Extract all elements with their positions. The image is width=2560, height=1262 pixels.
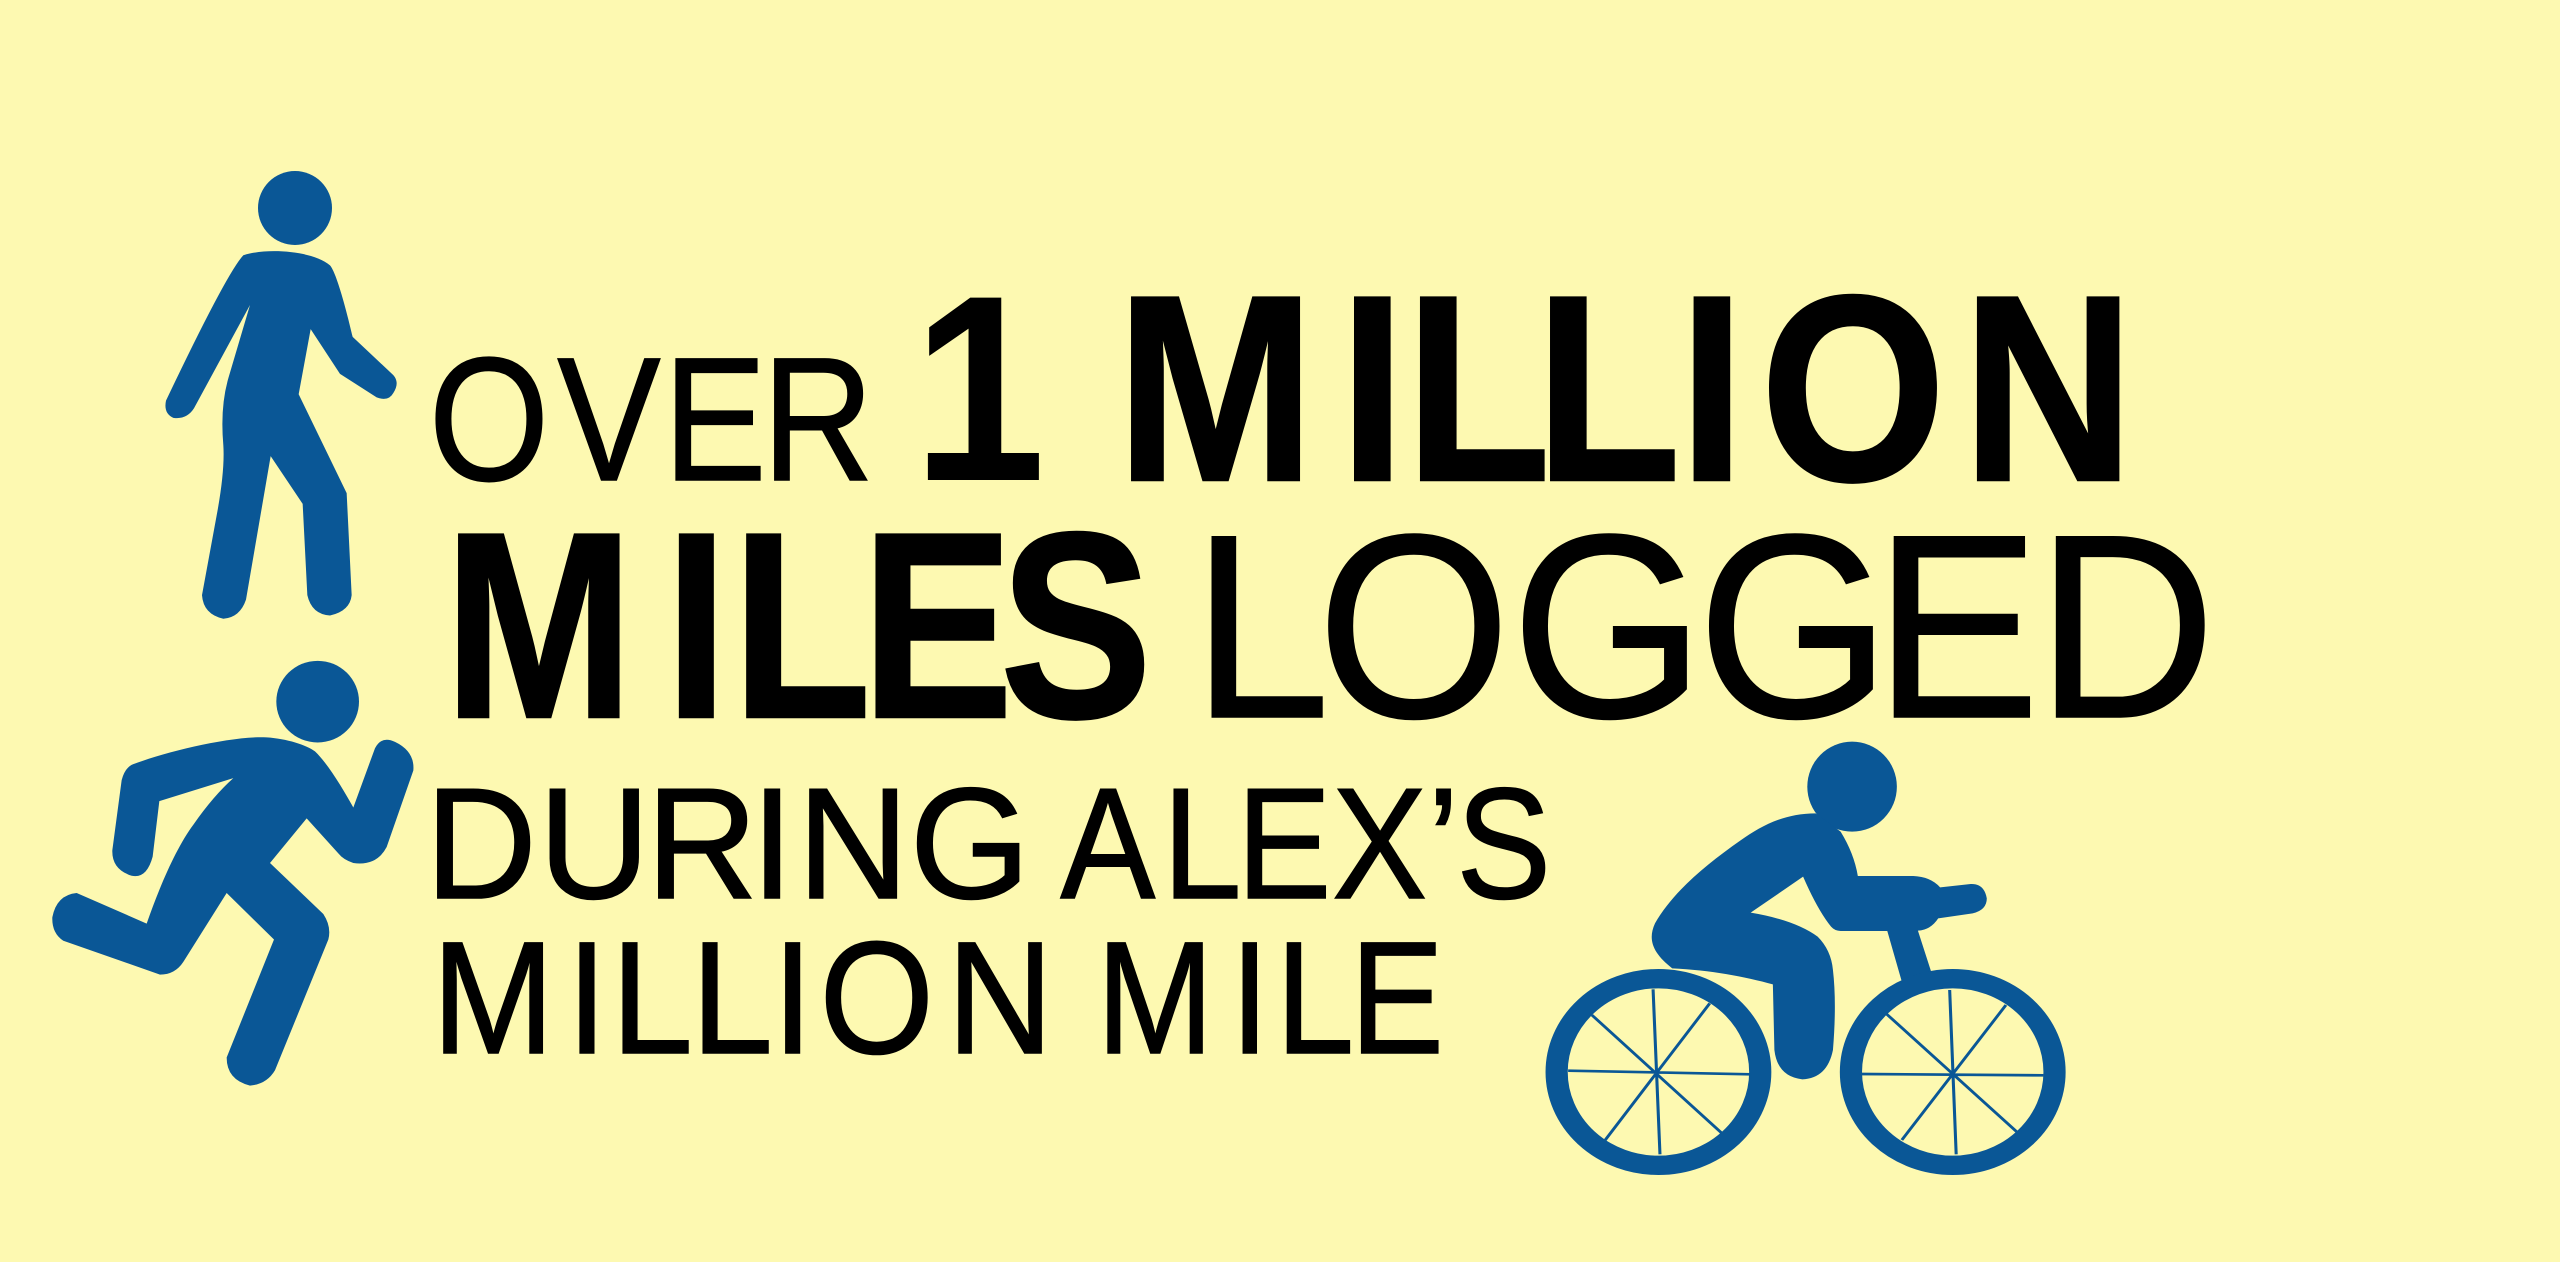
front and rear bicycle wheels [1557, 979, 2055, 1165]
text: LOGGED: LOGGED [1192, 481, 2216, 773]
icon: running person [52, 661, 413, 1086]
text: 1: 1 [913, 241, 1046, 537]
cyclist figure [1652, 742, 1987, 1079]
text: MILLION: MILLION [432, 908, 1053, 1087]
text: DURING: DURING [425, 756, 1030, 932]
text: MILE: MILE [1096, 909, 1444, 1087]
text: OVER: OVER [429, 322, 874, 518]
text: ALEX'S: ALEX’S [1060, 755, 1551, 932]
text: MILES: MILES [444, 478, 1152, 774]
text: MILLION: MILLION [1116, 241, 2134, 537]
icon: walking person [165, 171, 397, 619]
icon: cyclist [1557, 742, 2055, 1165]
subheading: during Alex's million mile [425, 755, 1551, 1087]
headline: over 1 million miles logged [429, 241, 2216, 774]
